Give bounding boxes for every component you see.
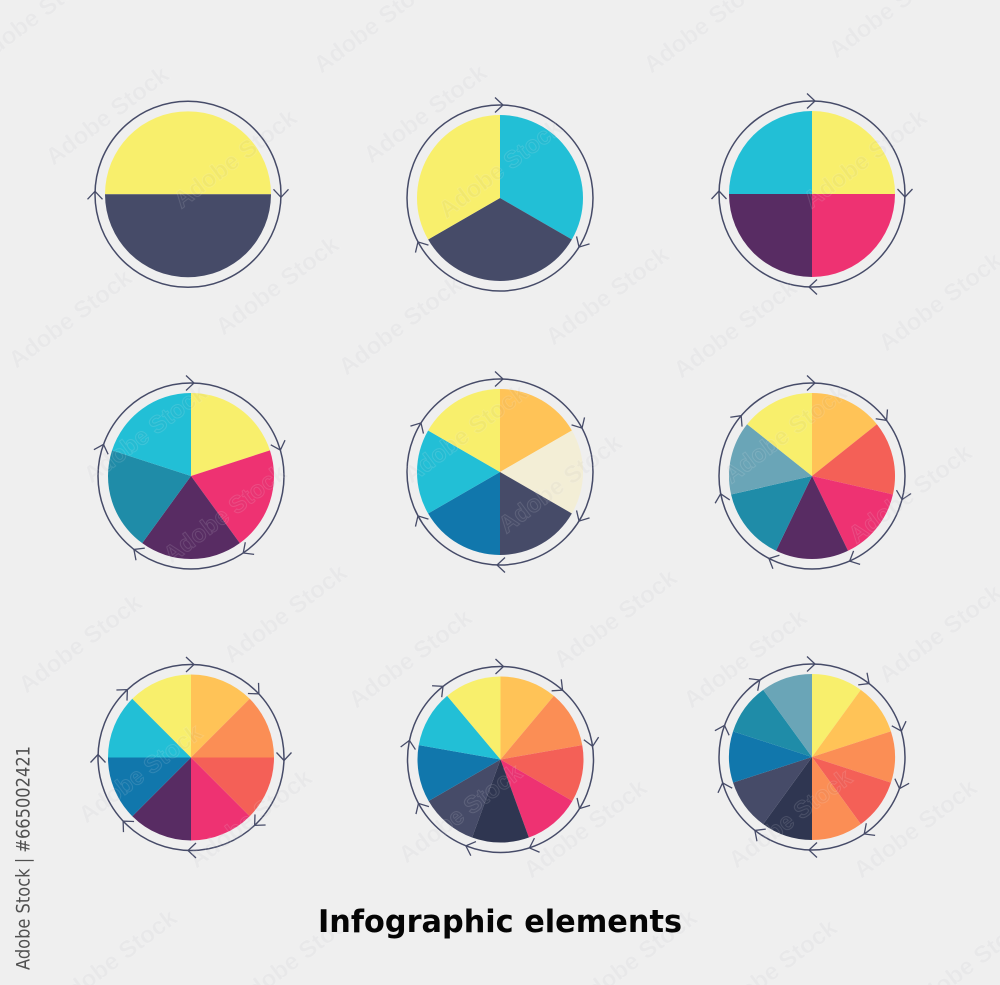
slices: 10 (718, 661, 906, 853)
watermark: Adobe Stock (344, 604, 478, 714)
watermark: Adobe Stock (669, 274, 803, 384)
watermark: Adobe Stock (4, 264, 138, 374)
ring with arrows (712, 94, 912, 294)
ring with arrows (88, 101, 288, 287)
slices: 8 (91, 657, 291, 858)
ring with arrows (713, 376, 911, 569)
watermark: Adobe Stock (334, 271, 468, 381)
slices: 3 (387, 105, 583, 311)
watermark: Adobe Stock (394, 759, 528, 869)
watermark: Adobe Stock (14, 589, 148, 699)
pie 4: five segments (78, 375, 294, 590)
watermark: Adobe Stock (41, 61, 175, 171)
slices: 9 (402, 662, 595, 856)
watermark: Adobe Stock (219, 559, 353, 669)
watermark: Adobe Stock (211, 231, 345, 341)
watermark: Adobe Stock (79, 379, 213, 489)
pie 5: six segments (392, 368, 608, 576)
ring with arrows (407, 98, 593, 291)
watermark: Adobe Stock (724, 764, 858, 874)
watermark: Adobe Stock (184, 764, 318, 874)
ring with arrows (401, 659, 600, 856)
watermark: Adobe Stock (799, 104, 933, 214)
stock id caption: Adobe Stock | #665002421 (14, 746, 34, 970)
watermark: Adobe Stock (844, 439, 978, 549)
ring with arrows (94, 376, 288, 569)
watermark: Adobe Stock (519, 774, 653, 884)
watermark: Adobe Stock (494, 429, 628, 539)
watermark: Adobe Stock (541, 241, 675, 351)
title: Infographic elements (318, 904, 682, 940)
watermark: Adobe Stock (359, 59, 493, 169)
watermark: Adobe Stock (159, 459, 293, 569)
slices: 4 (729, 111, 895, 277)
watermark: Adobe Stock (399, 379, 533, 489)
ring with arrows (407, 372, 593, 572)
watermark: Adobe Stock (434, 114, 568, 224)
watermark: Adobe Stock (549, 564, 683, 674)
pie 6: seven segments (713, 374, 917, 579)
slices: 7 (717, 374, 917, 579)
watermark: Adobe Stock (719, 379, 853, 489)
watermark: Adobe Stock (679, 604, 813, 714)
pie 8: nine segments (401, 659, 600, 856)
pie 1: two segments (88, 101, 288, 287)
ring with arrows (715, 656, 909, 858)
pie 3: four segments (712, 94, 912, 294)
slices: 2 (105, 111, 271, 277)
pie 9: ten segments (715, 656, 909, 858)
watermark: Adobe Stock (74, 719, 208, 829)
watermark: Adobe Stock (169, 104, 303, 214)
slices: 6 (392, 368, 608, 576)
watermark: Adobe Stock (849, 774, 983, 884)
ring with arrows (90, 657, 292, 858)
slices: 5 (78, 375, 294, 590)
pie 7: eight segments (90, 657, 292, 858)
pie 2: three segments (387, 98, 593, 311)
